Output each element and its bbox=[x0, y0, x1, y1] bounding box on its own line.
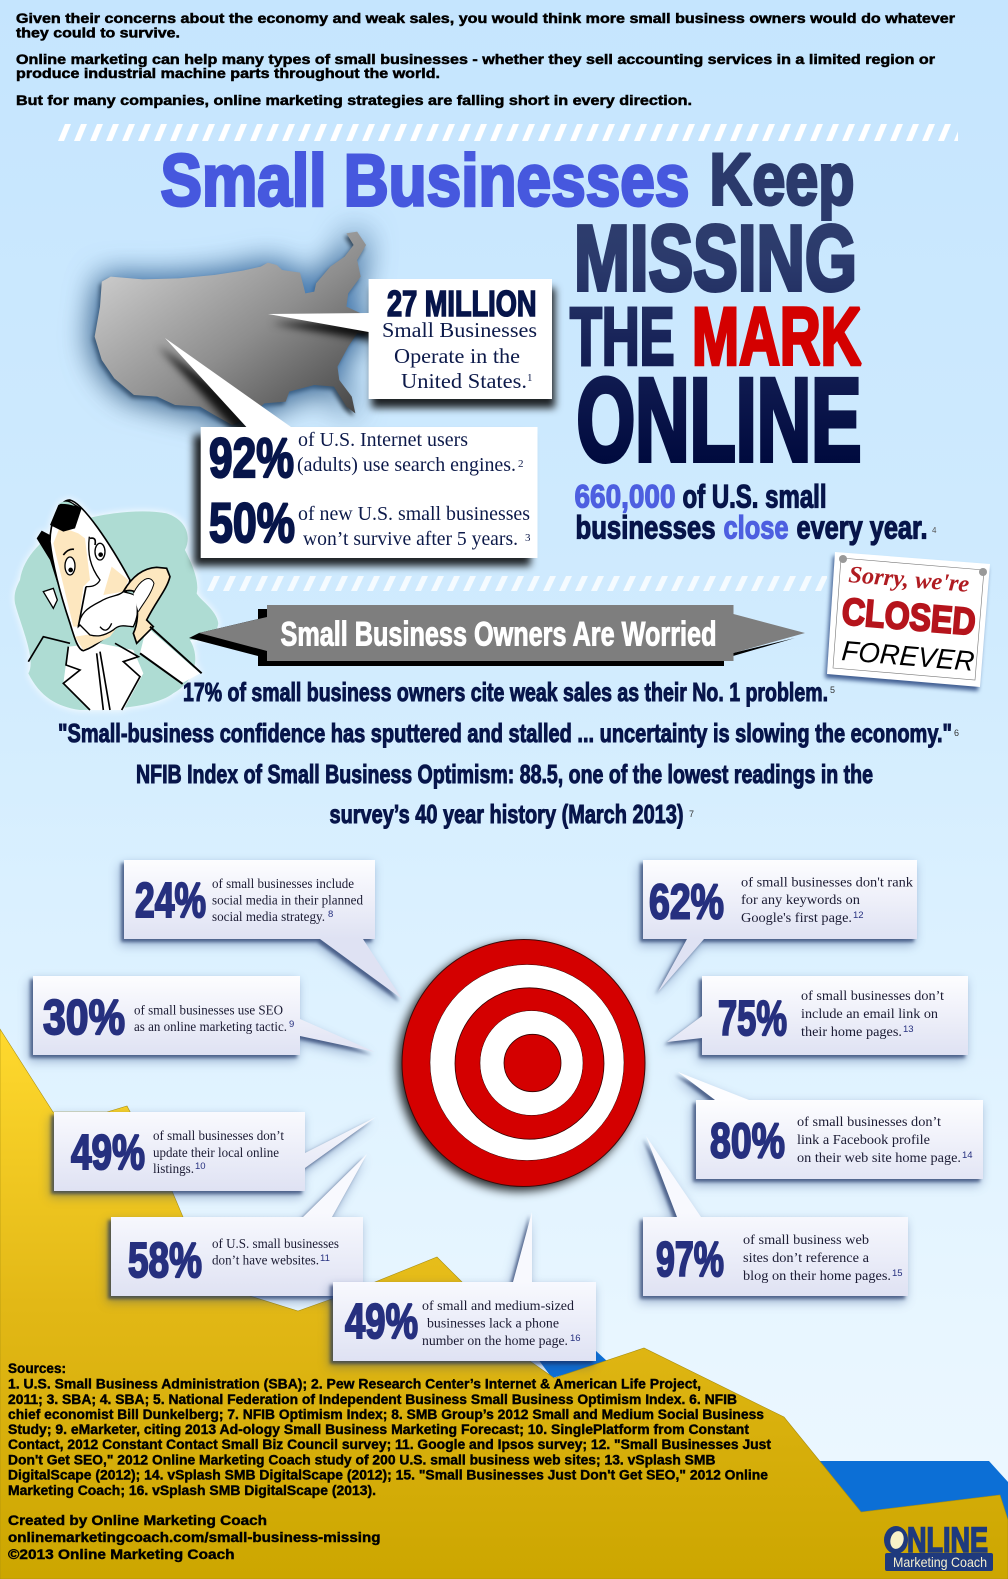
callout: 97%: 15 bbox=[892, 1268, 903, 1279]
sources list: Sources: bbox=[8, 1361, 66, 1376]
callout: 58%: don’t have websites. bbox=[212, 1253, 319, 1268]
660,000 closures statement bbox=[574, 478, 937, 546]
callout: 62%: 62% bbox=[649, 875, 724, 929]
660,000 closures statement: every year. bbox=[796, 510, 928, 546]
callout: 58%: 58% bbox=[128, 1234, 202, 1288]
callout: 75%: of small businesses don’t bbox=[801, 988, 944, 1003]
callout: 92% and 50% stats: of new U.S. small businesses bbox=[298, 503, 530, 525]
callout: 92% and 50% stats: of U.S. Internet users bbox=[298, 429, 468, 451]
sources list: Don't Get SEO," 2012 Online Marketing Coach study of 200 U.S. small business web sites; 13. vSplash SMB bbox=[8, 1452, 716, 1468]
title: missing the mark online bbox=[570, 206, 862, 486]
callout: 62% bbox=[643, 860, 917, 992]
callout: 97%: of small business web bbox=[743, 1232, 869, 1247]
callout: 62%: 12 bbox=[853, 910, 864, 921]
sign: sorry we're closed forever: FOREVER bbox=[841, 635, 976, 677]
callout: 80% bbox=[678, 1072, 983, 1179]
sources list: Study; 9. eMarketer, citing 2013 Ad-ology Small Business Marketing Forecast; 10. SinglePlatform from Constant bbox=[8, 1422, 750, 1437]
sign: sorry we're closed forever: CLOSED bbox=[840, 591, 977, 644]
callout: 49% phone number bbox=[333, 1212, 596, 1361]
callout: 58% bbox=[111, 1154, 367, 1296]
statement: NFIB index: survey’s 40 year history (March 2013) bbox=[330, 799, 684, 829]
callout: 24%: social media strategy. bbox=[212, 909, 325, 924]
banner: small business owners are worried bbox=[189, 605, 805, 666]
callout: 80%: on their web site home page. bbox=[797, 1150, 961, 1165]
callout: 24%: social media in their planned bbox=[212, 893, 363, 908]
statement: NFIB index: 7 bbox=[689, 809, 694, 819]
callout: 92% and 50% stats: 92% bbox=[209, 426, 294, 489]
mountains: yellow foreground bbox=[0, 1029, 1008, 1579]
callout: 30%: of small businesses use SEO bbox=[134, 1002, 283, 1017]
callout: 49% phone number: 49% bbox=[345, 1295, 418, 1349]
statement: weak sales: 5 bbox=[830, 685, 835, 695]
statement: confidence quote: 6 bbox=[954, 728, 959, 738]
callout: 27 million small businesses: Small Businesses bbox=[382, 318, 537, 342]
intro text: produce industrial machine parts throughout the world. bbox=[16, 65, 440, 81]
intro text: they could to survive. bbox=[16, 24, 180, 40]
banner: small business owners are worried: Small Business Owners Are Worried bbox=[280, 616, 716, 654]
sign: sorry we're closed forever: Sorry, we're bbox=[848, 562, 971, 598]
callout: 62%: Google's first page. bbox=[741, 910, 852, 925]
callout: 49% local listings bbox=[54, 1112, 376, 1191]
callout: 49% local listings: 10 bbox=[195, 1161, 206, 1172]
callout: 97%: blog on their home pages. bbox=[743, 1268, 891, 1283]
intro text: Online marketing can help many types of small businesses - whether they sell accounting services in a limited region or bbox=[16, 51, 936, 67]
sources list: Contact, 2012 Constant Contact Small Biz Council survey; 11. Google and Ipsos survey; 12. "Small Businesses Just bbox=[8, 1437, 772, 1452]
callout: 27 million small businesses bbox=[268, 279, 552, 399]
660,000 closures statement: 660,000 bbox=[574, 478, 676, 514]
sign: sorry we're closed forever bbox=[827, 552, 990, 687]
divider stripes top bbox=[58, 124, 958, 141]
target bullseye bbox=[402, 940, 645, 1186]
callout: 30%: as an online marketing tactic. bbox=[134, 1019, 287, 1034]
credits bbox=[8, 1513, 380, 1562]
callout: 62%: for any keywords on bbox=[741, 892, 860, 907]
callout: 49% local listings: update their local online bbox=[153, 1145, 279, 1160]
callout: 92% and 50% stats: 3 bbox=[525, 532, 531, 544]
660,000 closures statement: close bbox=[724, 510, 788, 546]
callout: 30% bbox=[33, 976, 375, 1055]
callout: 24% bbox=[124, 860, 402, 999]
callout: 97%: 97% bbox=[656, 1233, 724, 1287]
callout: 49% phone number: of small and medium-sized bbox=[422, 1298, 574, 1313]
callout: 49% phone number: businesses lack a phone bbox=[427, 1316, 559, 1330]
callout: 75%: 13 bbox=[903, 1024, 914, 1035]
callout: 97%: sites don’t reference a bbox=[743, 1250, 869, 1265]
callout: 49% phone number: number on the home page. bbox=[422, 1333, 568, 1348]
callout: 58%: 11 bbox=[320, 1253, 330, 1264]
callout: 62%: of small businesses don't rank bbox=[741, 875, 913, 890]
intro text: Given their concerns about the economy and weak sales, you would think more small business owners would do whatever bbox=[16, 10, 956, 26]
callout: 49% local listings: 49% bbox=[71, 1126, 145, 1180]
callout: 27 million small businesses: 27 MILLION bbox=[387, 283, 536, 324]
660,000 closures statement: of U.S. small bbox=[682, 478, 826, 514]
callout: 30%: 30% bbox=[43, 991, 125, 1045]
callout: 27 million small businesses: United States. bbox=[401, 369, 527, 393]
callout: 92% and 50% stats: won’t survive after 5 years. bbox=[303, 528, 518, 550]
title: missing the mark online: THE bbox=[570, 292, 674, 382]
logo: online marketing coach bbox=[884, 1521, 993, 1571]
sources list: Marketing Coach; 16. vSplash SMB DigitalScape (2013). bbox=[8, 1483, 376, 1498]
callout: 27 million small businesses: 1 bbox=[527, 372, 532, 384]
credits: onlinemarketingcoach.com/small-business-missing bbox=[8, 1530, 380, 1545]
callout: 30%: 9 bbox=[289, 1019, 294, 1030]
callout: 75%: their home pages. bbox=[801, 1024, 902, 1039]
callout: 80%: link a Facebook profile bbox=[797, 1132, 930, 1147]
callout: 92% and 50% stats bbox=[165, 338, 538, 558]
sources list: 2011; 3. SBA; 4. SBA; 5. National Federation of Independent Business Small Business Optimism Index. 6. NFIB bbox=[8, 1392, 737, 1407]
callout: 24%: 24% bbox=[135, 874, 206, 928]
660,000 closures statement: businesses bbox=[576, 510, 716, 546]
callout: 75%: include an email link on bbox=[801, 1006, 938, 1021]
callout: 92% and 50% stats: 50% bbox=[209, 491, 295, 554]
660,000 closures statement: 4 bbox=[932, 526, 937, 535]
US map bbox=[95, 232, 368, 425]
sources list: DigitalScape (2012); 14. vSplash SMB DigitalScape (2012); 15. "Small Businesses Just Don't Get SEO," 2012 Online bbox=[8, 1468, 768, 1482]
mountains: blue back layer bbox=[535, 1350, 1008, 1530]
callout: 80%: of small businesses don’t bbox=[797, 1114, 941, 1129]
statement: NFIB index bbox=[136, 759, 873, 829]
callout: 92% and 50% stats: 2 bbox=[518, 458, 524, 470]
callout: 49% local listings: listings. bbox=[153, 1161, 194, 1176]
callout: 97% bbox=[643, 1136, 908, 1296]
sources list: chief economist Bill Dunkelberg; 7. NFIB Optimism Index; 8. SMB Group’s 2012 Small and Medium Social Business bbox=[8, 1407, 764, 1422]
callout: 80%: 14 bbox=[962, 1150, 973, 1161]
title: small businesses keep: Keep bbox=[710, 140, 854, 220]
callout: 75% bbox=[667, 976, 968, 1055]
callout: 24%: of small businesses include bbox=[212, 876, 354, 891]
callout: 24%: 8 bbox=[328, 909, 333, 920]
intro text bbox=[16, 10, 956, 108]
callout: 75%: 75% bbox=[718, 992, 787, 1046]
title: missing the mark online: MISSING bbox=[574, 206, 857, 310]
intro text: But for many companies, online marketing strategies are falling short in every direction. bbox=[16, 92, 692, 108]
callout: 27 million small businesses: Operate in the bbox=[394, 344, 520, 368]
title: missing the mark online: MARK bbox=[692, 292, 862, 382]
sources list bbox=[8, 1361, 772, 1498]
callout: 80%: 80% bbox=[710, 1114, 785, 1168]
divider stripes middle bbox=[207, 576, 827, 591]
credits: Created by Online Marketing Coach bbox=[8, 1513, 267, 1528]
cartoon: worried man bbox=[15, 500, 218, 710]
credits: ©2013 Online Marketing Coach bbox=[8, 1547, 235, 1562]
logo: online marketing coach: Marketing Coach bbox=[893, 1554, 987, 1570]
title: small businesses keep: Small Businesses bbox=[160, 140, 690, 222]
callout: 92% and 50% stats: (adults) use search engines. bbox=[297, 454, 516, 476]
callout: 49% phone number: 16 bbox=[570, 1333, 581, 1344]
callout: 49% local listings: of small businesses don’t bbox=[153, 1128, 284, 1143]
sources list: 1. U.S. Small Business Administration (SBA); 2. Pew Research Center’s Internet & American Life Project, bbox=[8, 1376, 701, 1392]
callout: 58%: of U.S. small businesses bbox=[212, 1236, 339, 1251]
